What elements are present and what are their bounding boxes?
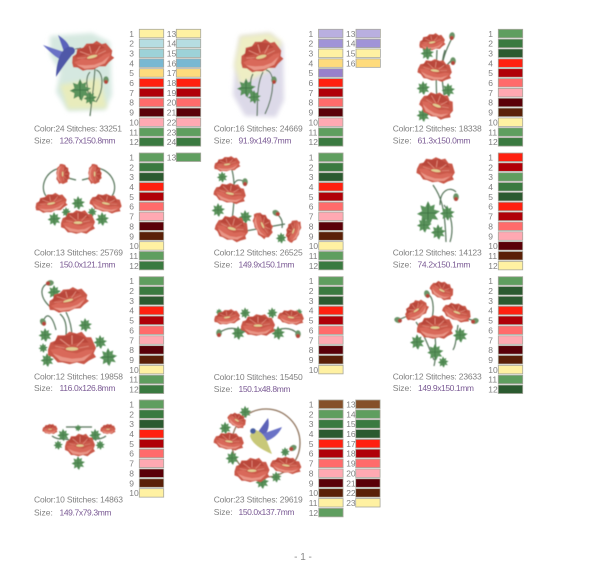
colour chart: design 4: 10 <box>129 241 139 251</box>
colour chart: design 6: 6 <box>488 202 493 212</box>
colour chart: design 2: 12 <box>308 137 318 147</box>
colour chart: design 9 <box>488 276 523 394</box>
colour chart: design 1: 24 <box>167 137 177 147</box>
colour chart: design 6: 4 <box>488 182 493 192</box>
caption: design 9: Color:12 Stitches: 23633 <box>393 372 482 382</box>
colour chart: design 11: 21 <box>346 478 356 488</box>
caption: design 11: Size: <box>214 507 233 517</box>
colour chart: design 5: 4 <box>309 182 314 192</box>
embroidery: poppy wreath <box>33 164 124 234</box>
colour chart: design 1: 8 <box>129 98 134 108</box>
caption: design 8: 150.1x48.8mm <box>238 384 290 394</box>
colour chart: design 9: 9 <box>488 355 493 365</box>
caption: design 5: Size: <box>214 260 233 270</box>
colour chart: design 2: 14 <box>346 39 356 49</box>
caption: design 3 <box>393 124 482 146</box>
colour chart: design 11: 16 <box>346 429 356 439</box>
caption: design 7: 116.0x126.8mm <box>60 383 116 393</box>
colour chart: design 8: 10 <box>309 365 318 375</box>
caption: design 2: Color:16 Stitches: 24669 <box>214 124 303 134</box>
colour chart: design 5: 10 <box>309 241 318 251</box>
colour chart: design 1: 15 <box>167 48 177 58</box>
caption: design 6: Color:12 Stitches: 14123 <box>393 248 482 258</box>
colour chart: design 2: 16 <box>346 58 356 68</box>
colour chart: design 10: 6 <box>129 449 134 459</box>
colour chart: design 11: 15 <box>346 419 356 429</box>
colour chart: design 4: 13 <box>167 152 177 162</box>
colour chart: design 8: 7 <box>309 335 314 345</box>
colour chart: design 9: 8 <box>488 345 493 355</box>
colour chart: design 4: 9 <box>129 231 134 241</box>
caption: design 11: Color:23 Stitches: 29619 <box>214 494 303 504</box>
colour chart: design 8: 9 <box>309 355 314 365</box>
colour chart: design 5: 12 <box>309 261 318 271</box>
colour chart: design 8: 8 <box>309 345 314 355</box>
embroidery: two poppies with buds <box>38 280 117 367</box>
colour chart: design 1: 20 <box>167 98 177 108</box>
colour chart: design 1: 6 <box>129 78 134 88</box>
colour chart: design 11: 3 <box>309 419 314 429</box>
colour chart: design 11: 6 <box>309 449 314 459</box>
colour chart: design 5: 1 <box>309 152 314 162</box>
caption: design 5: 149.9x150.1mm <box>238 260 294 270</box>
colour chart: design 9: 12 <box>488 385 498 395</box>
colour chart: design 11 <box>309 400 380 518</box>
colour chart: design 6: 12 <box>488 261 498 271</box>
embroidery: single poppy with bud <box>415 155 459 242</box>
colour chart: design 2: 1 <box>308 29 314 39</box>
caption: design 8: Size: <box>214 384 233 394</box>
colour chart: design 2: 13 <box>346 29 356 39</box>
colour chart: design 7: 7 <box>129 335 134 345</box>
embroidery: poppy bouquet <box>393 277 480 368</box>
caption: design 10: 149.7x79.3mm <box>60 508 112 518</box>
panel: design 1 <box>34 29 201 147</box>
colour chart: design 11: 12 <box>309 508 318 518</box>
embroidery: horizontal poppy border <box>213 307 305 340</box>
caption: design 1: Color:24 Stitches: 33251 <box>34 124 122 134</box>
colour chart: design 3: 7 <box>488 88 493 98</box>
colour chart: design 5: 5 <box>309 192 314 202</box>
colour chart: design 1: 10 <box>129 117 139 127</box>
colour chart: design 11: 22 <box>346 488 356 498</box>
colour chart: design 1: 17 <box>167 68 177 78</box>
colour chart: design 4: 2 <box>129 162 134 172</box>
colour chart: design 4: 6 <box>129 202 134 212</box>
colour chart: design 9: 10 <box>488 365 498 375</box>
colour chart: design 4: 8 <box>129 221 134 231</box>
colour chart: design 9: 6 <box>488 325 493 335</box>
caption: design 9: 149.9x150.1mm <box>418 383 474 393</box>
panel: design 8 <box>213 276 343 394</box>
colour chart: design 5: 3 <box>309 172 314 182</box>
colour chart: design 11: 10 <box>309 488 318 498</box>
colour chart: design 6: 3 <box>488 172 493 182</box>
colour chart: design 9: 3 <box>488 296 493 306</box>
colour chart: design 5: 9 <box>309 231 314 241</box>
caption: design 10: Color:10 Stitches: 14863 <box>34 494 123 504</box>
colour chart: design 1: 18 <box>167 78 177 88</box>
colour chart: design 2: 2 <box>308 39 314 49</box>
colour chart: design 10: 2 <box>129 409 134 419</box>
colour chart: design 11: 5 <box>309 439 314 449</box>
panel: design 11 <box>213 400 380 518</box>
caption: design 1 <box>34 124 122 146</box>
caption: design 3: Size: <box>393 136 412 146</box>
colour chart: design 2: 11 <box>308 127 318 137</box>
colour chart: design 1: 3 <box>129 48 134 58</box>
panel: design 2 <box>214 29 380 147</box>
colour chart: design 3: 1 <box>488 29 493 39</box>
caption: design 1: 126.7x150.8mm <box>60 136 116 146</box>
colour chart: design 7: 1 <box>129 276 134 286</box>
embroidery: triangular poppy motif <box>42 424 116 470</box>
colour chart: design 9: 1 <box>488 276 493 286</box>
colour chart: design 11: 17 <box>346 439 356 449</box>
colour chart: design 2: 8 <box>308 98 314 108</box>
caption: design 6 <box>393 248 482 270</box>
caption: design 2 <box>214 124 303 146</box>
colour chart: design 2: 5 <box>308 68 314 78</box>
caption: design 1: Size: <box>34 136 53 146</box>
panel: design 3 <box>393 29 523 147</box>
caption: design 8 <box>214 372 303 394</box>
caption: design 4 <box>34 248 123 270</box>
colour chart: design 1: 2 <box>129 39 134 49</box>
colour chart: design 4: 11 <box>129 251 138 261</box>
colour chart: design 2: 6 <box>308 78 314 88</box>
colour chart: design 8: 4 <box>309 306 314 316</box>
colour chart: design 4: 1 <box>129 152 134 162</box>
colour chart: design 1: 7 <box>129 88 134 98</box>
colour chart: design 6: 8 <box>488 221 493 231</box>
colour chart: design 5: 8 <box>309 221 314 231</box>
colour chart: design 10: 3 <box>129 419 134 429</box>
embroidery: three poppies vertical <box>416 32 457 123</box>
caption: design 3: 61.3x150.0mm <box>418 136 470 146</box>
colour chart: design 11: 20 <box>346 468 356 478</box>
colour chart: design 3: 12 <box>488 137 498 147</box>
colour chart: design 11: 13 <box>346 400 356 410</box>
caption: design 10 <box>34 494 123 518</box>
colour chart: design 4: 7 <box>129 212 134 222</box>
colour chart: design 10 <box>129 400 164 498</box>
colour chart: design 11: 8 <box>309 468 314 478</box>
colour chart: design 10: 5 <box>129 439 134 449</box>
caption: design 3: Color:12 Stitches: 18338 <box>393 124 482 134</box>
panel: design 6 <box>393 152 523 271</box>
panel: design 10 <box>34 400 164 518</box>
colour chart: design 2 <box>308 29 380 147</box>
colour chart: design 1: 11 <box>129 127 138 137</box>
colour chart: design 5: 6 <box>309 202 314 212</box>
caption: design 11 <box>214 494 303 517</box>
colour chart: design 2: 7 <box>308 88 314 98</box>
colour chart: design 4: 3 <box>129 172 134 182</box>
colour chart: design 6: 7 <box>488 212 493 222</box>
colour chart: design 8 <box>309 276 343 375</box>
caption: design 4: 150.0x121.1mm <box>60 260 116 270</box>
caption: design 6: 74.2x150.1mm <box>418 260 470 270</box>
colour chart: design 3: 6 <box>488 78 493 88</box>
colour chart: design 2: 9 <box>308 108 314 118</box>
colour chart: design 11: 18 <box>346 449 356 459</box>
caption: design 2: 91.9x149.7mm <box>238 136 292 146</box>
colour chart: design 4 <box>129 152 201 271</box>
colour chart: design 3: 5 <box>488 68 493 78</box>
colour chart: design 7: 8 <box>129 345 134 355</box>
panel: design 4 <box>33 152 201 271</box>
colour chart: design 9: 11 <box>488 375 497 385</box>
colour chart: design 7: 11 <box>129 375 138 385</box>
colour chart: design 2: 4 <box>308 58 314 68</box>
colour chart: design 1: 21 <box>167 108 177 118</box>
colour chart: design 7: 4 <box>129 306 134 316</box>
colour chart: design 8: 6 <box>309 325 314 335</box>
colour chart: design 6: 5 <box>488 192 493 202</box>
caption: design 6: Size: <box>393 260 412 270</box>
caption: design 11: 150.0x137.7mm <box>238 507 294 517</box>
caption: design 9 <box>393 372 482 393</box>
caption: design 4: Size: <box>34 260 53 270</box>
colour chart: design 3: 2 <box>488 39 493 49</box>
caption: design 7 <box>34 372 123 393</box>
colour chart: design 2: 10 <box>308 117 318 127</box>
colour chart: design 1: 16 <box>167 58 177 68</box>
colour chart: design 11: 4 <box>309 429 314 439</box>
colour chart: design 10: 1 <box>129 400 134 410</box>
colour chart: design 8: 1 <box>309 276 314 286</box>
colour chart: design 2: 3 <box>308 48 314 58</box>
panel: design 7 <box>34 276 164 394</box>
colour chart: design 9: 5 <box>488 316 493 326</box>
caption: design 4: Color:13 Stitches: 25769 <box>34 248 123 258</box>
colour chart: design 7 <box>129 276 164 394</box>
colour chart: design 7: 3 <box>129 296 134 306</box>
colour chart: design 9: 2 <box>488 286 493 296</box>
colour chart: design 11: 9 <box>309 478 314 488</box>
colour chart: design 3: 8 <box>488 98 493 108</box>
colour chart: design 1: 9 <box>129 108 134 118</box>
colour chart: design 11: 2 <box>309 409 314 419</box>
caption: design 2: Size: <box>214 136 233 146</box>
colour chart: design 7: 12 <box>129 385 139 395</box>
colour chart: design 11: 7 <box>309 459 314 469</box>
colour chart: design 11: 11 <box>309 498 318 508</box>
panel: design 5 <box>212 152 343 271</box>
colour chart: design 1: 13 <box>167 29 177 39</box>
colour chart: design 3: 10 <box>488 117 498 127</box>
caption: design 8: Color:10 Stitches: 15450 <box>214 372 303 382</box>
colour chart: design 2: 15 <box>346 48 356 58</box>
colour chart: design 8: 5 <box>309 316 314 326</box>
colour chart: design 11: 23 <box>346 498 356 508</box>
colour chart: design 1: 14 <box>167 39 177 49</box>
colour chart: design 10: 9 <box>129 478 134 488</box>
colour chart: design 1: 19 <box>167 88 177 98</box>
colour chart: design 1 <box>129 29 201 147</box>
colour chart: design 1: 22 <box>167 117 177 127</box>
colour chart: design 4: 5 <box>129 192 134 202</box>
colour chart: design 1: 23 <box>167 127 177 137</box>
embroidery: hummingbird and poppy ring <box>213 406 302 489</box>
colour chart: design 11: 19 <box>346 459 356 469</box>
caption: design 7: Size: <box>34 383 53 393</box>
colour chart: design 10: 7 <box>129 459 134 469</box>
colour chart: design 1: 5 <box>129 68 134 78</box>
embroidery: poppy on pastel background <box>233 33 285 117</box>
panel: design 9 <box>393 276 523 394</box>
colour chart: design 4: 4 <box>129 182 134 192</box>
colour chart: design 6: 11 <box>488 251 497 261</box>
colour chart: design 5: 11 <box>309 251 318 261</box>
colour chart: design 3: 11 <box>488 127 497 137</box>
caption: design 7: Color:12 Stitches: 19858 <box>34 372 123 382</box>
embroidery: poppy corner <box>212 155 303 244</box>
colour chart: design 11: 14 <box>346 409 356 419</box>
colour chart: design 3: 9 <box>488 108 493 118</box>
colour chart: design 10: 4 <box>129 429 134 439</box>
caption: design 5 <box>214 248 303 270</box>
colour chart: design 7: 10 <box>129 365 139 375</box>
colour chart: design 9: 7 <box>488 335 493 345</box>
colour chart: design 6: 9 <box>488 231 493 241</box>
colour chart: design 5: 2 <box>309 162 314 172</box>
colour chart: design 10: 10 <box>129 488 139 498</box>
embroidery: hummingbird and poppy on pastel background <box>43 33 116 116</box>
colour chart: design 7: 9 <box>129 355 134 365</box>
colour chart: design 3: 4 <box>488 58 493 68</box>
colour chart: design 7: 2 <box>129 286 134 296</box>
page number: - 1 - <box>294 552 312 563</box>
colour chart: design 3: 3 <box>488 48 493 58</box>
colour chart: design 6 <box>488 152 523 271</box>
colour chart: design 3 <box>488 29 523 147</box>
colour chart: design 4: 12 <box>129 261 139 271</box>
colour chart: design 1: 4 <box>129 58 134 68</box>
colour chart: design 11: 1 <box>309 400 314 410</box>
caption: design 9: Size: <box>393 383 412 393</box>
colour chart: design 6: 10 <box>488 241 498 251</box>
colour chart: design 6: 2 <box>488 162 493 172</box>
colour chart: design 8: 3 <box>309 296 314 306</box>
colour chart: design 6: 1 <box>488 152 493 162</box>
colour chart: design 1: 1 <box>129 29 134 39</box>
colour chart: design 1: 12 <box>129 137 139 147</box>
colour chart: design 7: 6 <box>129 325 134 335</box>
caption: design 5: Color:12 Stitches: 26525 <box>214 248 303 258</box>
colour chart: design 9: 4 <box>488 306 493 316</box>
colour chart: design 5 <box>309 152 343 271</box>
colour chart: design 8: 2 <box>309 286 314 296</box>
colour chart: design 5: 7 <box>309 212 314 222</box>
colour chart: design 7: 5 <box>129 316 134 326</box>
colour chart: design 10: 8 <box>129 468 134 478</box>
caption: design 10: Size: <box>34 508 53 518</box>
